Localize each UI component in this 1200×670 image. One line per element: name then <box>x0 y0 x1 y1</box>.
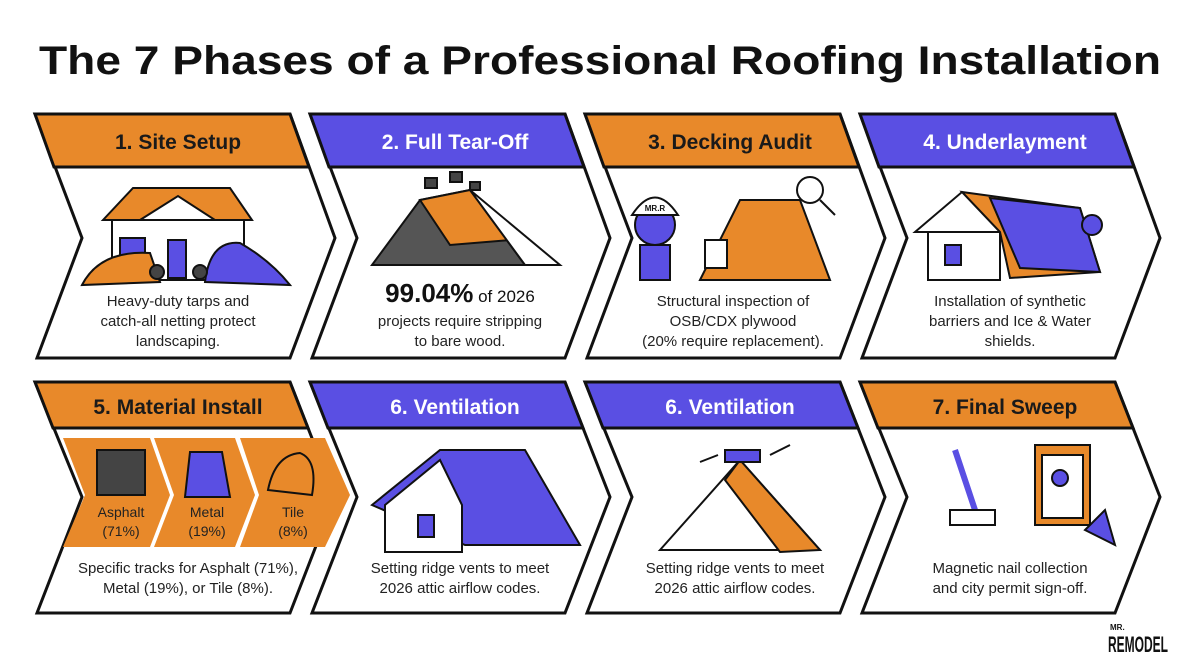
panel: 6 ventilation <box>310 382 610 613</box>
material tracks: (71%) <box>102 523 140 539</box>
panel: 7 final sweep <box>860 382 1160 613</box>
material tracks <box>63 438 350 547</box>
icon: roof with underlayment roll <box>915 192 1102 280</box>
icon: broom and clipboard <box>950 445 1115 545</box>
heading: 7. Final Sweep <box>933 396 1077 419</box>
text: Setting ridge vents to meet <box>646 560 825 577</box>
text: Heavy-duty tarps and <box>107 293 249 310</box>
text: shields. <box>985 333 1035 350</box>
text: and city permit sign-off. <box>933 580 1087 597</box>
heading: 2. Full Tear-Off <box>382 131 529 154</box>
material tracks: Asphalt <box>98 504 144 520</box>
text: Setting ridge vents to meet <box>371 560 550 577</box>
text: 2026 attic airflow codes. <box>380 580 540 597</box>
panel: 2 tear-off: to bare wood. <box>415 333 505 350</box>
panel: 1 site setup <box>35 114 335 358</box>
icon: roof tear-off <box>372 172 560 265</box>
logo <box>1108 623 1168 657</box>
text: (20% require replacement). <box>642 333 824 350</box>
text: 2026 attic airflow codes. <box>655 580 815 597</box>
stat text: 99.04% of 2026 <box>385 278 535 308</box>
text: landscaping. <box>136 333 220 350</box>
material tracks: (19%) <box>188 523 226 539</box>
text: Structural inspection of <box>657 293 810 310</box>
text: catch-all netting protect <box>100 313 256 330</box>
text: OSB/CDX plywood <box>670 313 796 330</box>
material tracks: Tile <box>282 504 304 520</box>
icon: house with tarps <box>82 188 290 285</box>
title: The 7 Phases of a Professional Roofing Installation <box>39 39 1161 83</box>
heading: 5. Material Install <box>93 396 263 419</box>
panel: 2 tear-off: projects require stripping <box>378 313 542 330</box>
text: barriers and Ice & Water <box>929 313 1091 330</box>
panel: 3 decking audit <box>585 114 885 358</box>
logo: MR. <box>1110 623 1125 632</box>
panel: 6 ventilation (second) <box>585 382 885 613</box>
text: Installation of synthetic <box>934 293 1086 310</box>
heading: 6. Ventilation <box>390 396 520 419</box>
heading: 3. Decking Audit <box>648 131 812 154</box>
heading: 1. Site Setup <box>115 131 241 154</box>
icon: inspector with magnifier <box>632 177 835 280</box>
icon: ridge vent <box>660 445 820 552</box>
icon: house with blue roof <box>372 450 580 552</box>
icon: inspector with magnifier: MR.R <box>645 204 665 213</box>
material tracks: (8%) <box>278 523 308 539</box>
text: Specific tracks for Asphalt (71%), <box>78 560 298 577</box>
panel: 4 underlayment <box>860 114 1160 358</box>
text: Magnetic nail collection <box>932 560 1088 577</box>
panel: 5 material install <box>35 382 350 613</box>
panel: 2 tear-off <box>310 114 610 358</box>
heading: 4. Underlayment <box>923 131 1087 154</box>
material tracks: Metal <box>190 504 224 520</box>
heading: 6. Ventilation <box>665 396 795 419</box>
text: Metal (19%), or Tile (8%). <box>103 580 273 597</box>
